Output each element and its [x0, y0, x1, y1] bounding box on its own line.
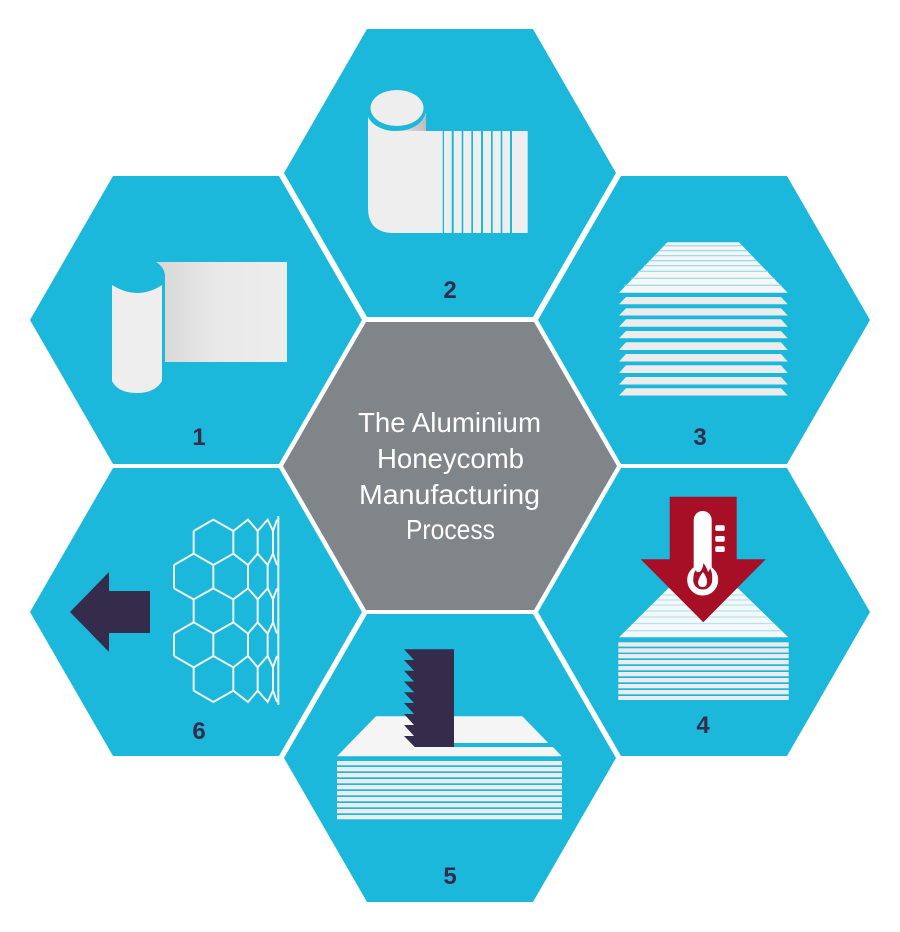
step number 6: 6: [192, 718, 206, 745]
panel: step 2 hexagon: [284, 29, 616, 317]
step number 3: 3: [693, 424, 707, 451]
panel: step 5 hexagon: [284, 614, 616, 902]
icon: stacked sheets: [619, 242, 788, 396]
panel: step 1 hexagon: [30, 176, 362, 464]
icon: aluminium roll: [112, 262, 287, 393]
title: Honeycomb: [377, 443, 524, 474]
icon: heated sheet stack: [618, 588, 789, 700]
step number 4: 4: [696, 712, 710, 739]
title: Process: [406, 514, 495, 545]
title: The Aluminium: [358, 407, 541, 438]
title: Manufacturing: [359, 479, 540, 510]
icon: sawing sheet stack: [337, 649, 562, 819]
step number 1: 1: [192, 424, 206, 451]
panel: central grey hexagon with title: [283, 322, 617, 610]
icon: dark left arrow: [70, 572, 150, 652]
title: [358, 407, 541, 545]
panel: step 4 hexagon: [538, 468, 870, 756]
panel: step 3 hexagon: [538, 176, 870, 464]
icon: expanded honeycomb: [174, 516, 278, 705]
panel: step 6 hexagon: [30, 468, 362, 756]
step number 5: 5: [443, 863, 457, 890]
icon: thermometer with flame: [690, 511, 725, 592]
icon: red down arrow: [641, 497, 766, 622]
icon: roll cut into strips: [368, 88, 528, 233]
step number 2: 2: [443, 277, 457, 304]
